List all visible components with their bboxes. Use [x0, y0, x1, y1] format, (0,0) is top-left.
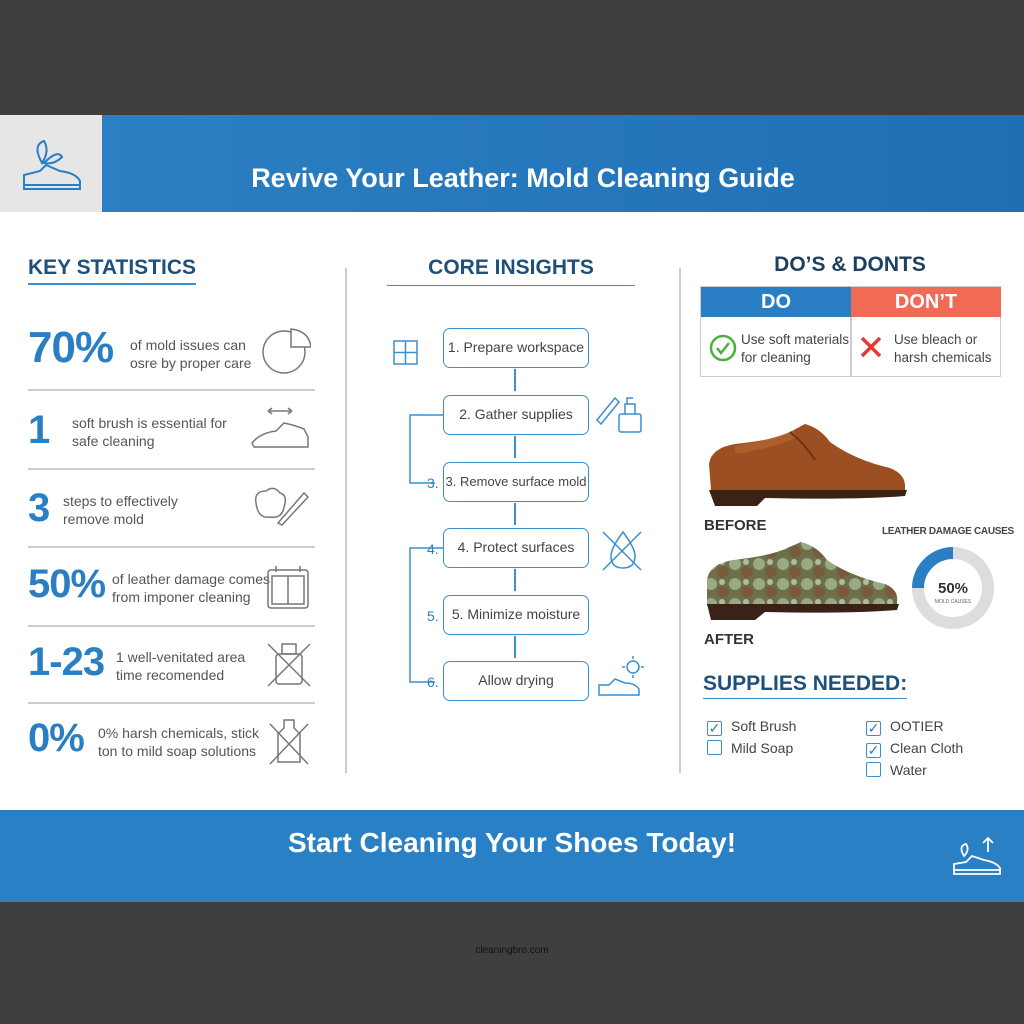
text: 6. — [427, 674, 439, 690]
icon: no water — [602, 530, 642, 570]
connector brackets — [409, 414, 443, 683]
icon: shoe arrow — [953, 836, 1001, 875]
checklist: supplies: Mild Soap — [731, 740, 793, 756]
text: 3. — [427, 475, 439, 491]
stat 1-23 — [28, 640, 310, 686]
stat 1: soft brush is essential for — [72, 415, 227, 431]
stat 0%: 0% — [28, 716, 84, 760]
step boxes: 1. Prepare workspace — [448, 339, 584, 355]
label: after: AFTER — [704, 631, 754, 648]
heading: do's and donts: DO’S & DONTS — [774, 253, 926, 276]
stat 3: remove mold — [63, 511, 144, 527]
heading: core insights: CORE INSIGHTS — [428, 256, 594, 279]
footer banner: Start Cleaning Your Shoes Today! — [288, 827, 736, 858]
checklist: supplies: Soft Brush — [731, 718, 796, 734]
text: 5. — [427, 608, 439, 624]
checklist: supplies: Clean Cloth — [890, 740, 963, 756]
stat 3 — [28, 486, 309, 530]
donut chart: leather damage causes: LEATHER DAMAGE CAUSES — [882, 526, 1014, 537]
checklist: supplies: ✓ — [868, 742, 879, 758]
flowchart: core insights steps — [393, 340, 644, 696]
text: 5. Minimize moisture — [452, 606, 580, 622]
stat 1-23: time recomended — [116, 667, 224, 683]
table: do and dont: DON’T — [895, 291, 957, 313]
text: 2. Gather supplies — [459, 406, 573, 422]
stat 3: 3 — [28, 486, 49, 530]
stat 3: steps to effectively — [63, 493, 178, 509]
text: 4. Protect surfaces — [458, 539, 574, 555]
heading: key statistics: KEY STATISTICS — [28, 256, 196, 279]
table: do and dont: harsh chemicals — [894, 350, 992, 365]
image: shoe before — [709, 424, 907, 506]
header title banner: Revive Your Leather: Mold Cleaning Guide — [251, 163, 795, 193]
text: 3. Remove surface mold — [446, 474, 586, 489]
checklist: supplies: ✓ — [709, 720, 720, 736]
table: do and dont — [700, 286, 1001, 377]
text: Allow drying — [478, 672, 554, 688]
checklist: supplies — [707, 718, 963, 778]
icon: shoe sun — [598, 656, 644, 696]
icon: brush and bottle — [596, 396, 642, 433]
footer credit: cleaningbro.com — [475, 945, 549, 956]
stat 1-23: 1-23 — [28, 640, 104, 684]
label: before: BEFORE — [704, 517, 767, 534]
stat 50%: of leather damage comes — [112, 571, 270, 587]
stat 50% — [28, 562, 309, 609]
header title banner — [102, 115, 1024, 212]
heading: core insights — [387, 256, 635, 286]
table: do and dont: Use bleach or — [894, 332, 977, 347]
icon: grid — [393, 340, 418, 365]
checklist: supplies: ✓ — [868, 720, 879, 736]
donut chart: leather damage causes: 50% — [938, 580, 968, 597]
stat 70%: of mold issues can — [130, 337, 246, 353]
content area — [0, 212, 1024, 810]
header icon panel — [0, 115, 102, 212]
stat 1 — [28, 408, 309, 452]
stat 0%: 0% harsh chemicals, stick — [98, 725, 259, 741]
donut chart: leather damage causes: MOLD CAUSES — [935, 599, 972, 605]
stat 50%: 50% — [28, 562, 105, 606]
divider lines — [345, 268, 346, 773]
stat 0% — [28, 716, 308, 764]
step boxes — [443, 328, 589, 368]
table: do and dont: Use soft materials — [741, 332, 849, 347]
stat 50%: from imponer cleaning — [112, 589, 251, 605]
checklist: supplies: Water — [890, 762, 927, 778]
footer banner — [0, 810, 1024, 902]
stat 70%: 70% — [28, 323, 113, 372]
stat 0%: ton to mild soap solutions — [98, 743, 256, 759]
image: shoe after — [707, 542, 899, 620]
donut chart: leather damage causes — [882, 526, 1014, 629]
checklist: supplies: OOTIER — [890, 718, 944, 734]
stat 70% — [28, 323, 311, 374]
table: do and dont: for cleaning — [741, 350, 811, 365]
table: do and dont: DO — [761, 291, 791, 313]
stat 70%: osre by proper care — [130, 355, 251, 371]
text: 4. — [427, 541, 439, 557]
heading: supplies needed: SUPPLIES NEEDED: — [703, 672, 907, 695]
stat 1: safe cleaning — [72, 433, 155, 449]
stat 1-23: 1 well-venitated area — [116, 649, 245, 665]
stat 1: 1 — [28, 408, 49, 452]
